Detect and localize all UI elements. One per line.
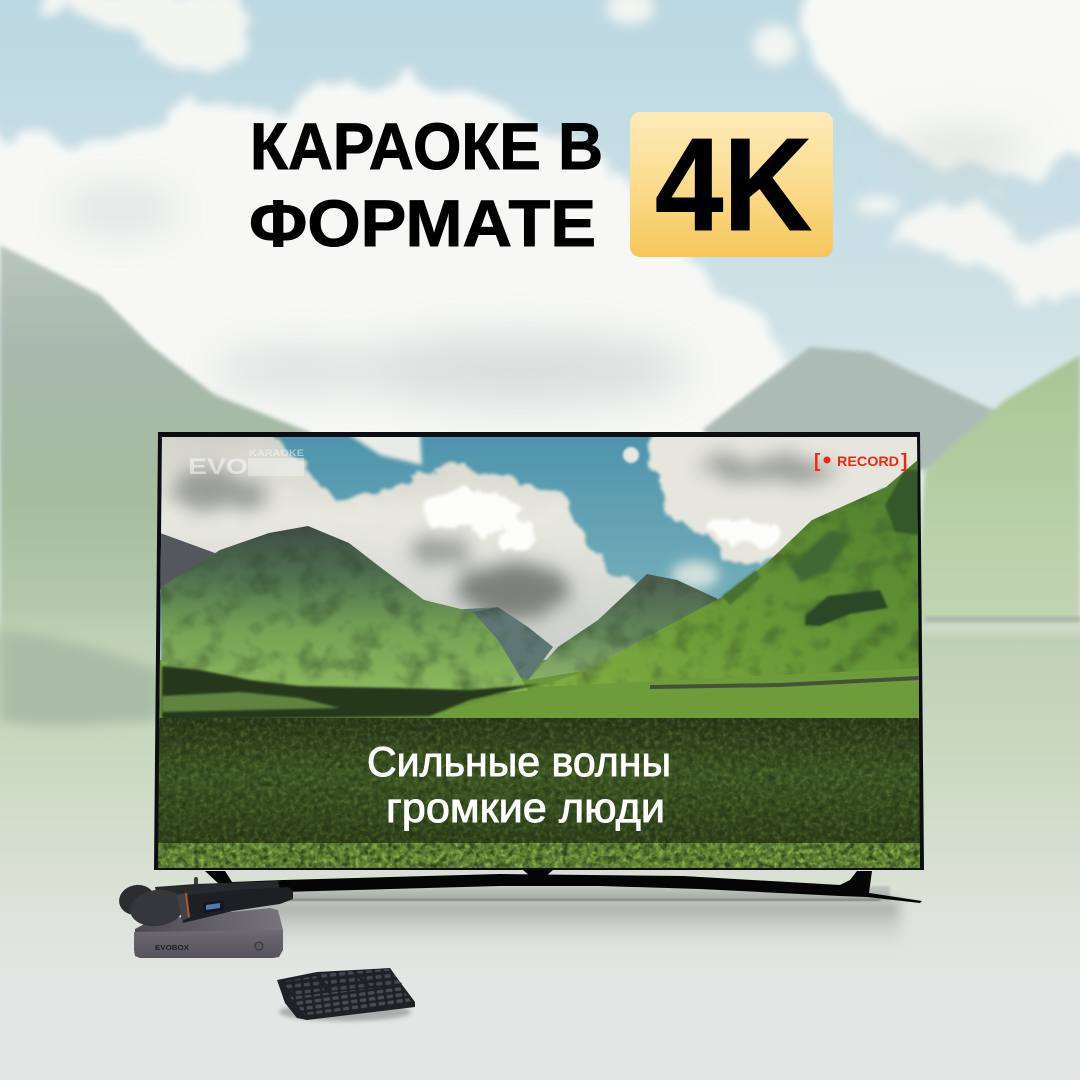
microphones bbox=[117, 877, 293, 930]
big central cloud bbox=[0, 78, 800, 450]
small top clouds bbox=[606, 0, 900, 214]
bright grass strip bbox=[150, 843, 930, 870]
title: karaoke in format: КАРАОКЕ В bbox=[250, 109, 603, 183]
lyric band over grass bbox=[150, 718, 930, 843]
logo: EVOBOX karaoke: EVO bbox=[188, 454, 248, 479]
screen mountains bbox=[150, 450, 930, 720]
title: karaoke in format bbox=[249, 109, 603, 260]
logo: EVOBOX karaoke: KARAOKE bbox=[249, 448, 304, 458]
tv frame bbox=[154, 432, 924, 870]
top right cloud bbox=[800, 0, 1080, 175]
top left cloud bbox=[40, 0, 248, 72]
lyrics on screen: Сильные волны bbox=[367, 738, 671, 785]
lyrics on screen: громкие люди bbox=[386, 784, 665, 831]
screen meadow and trees bbox=[162, 666, 920, 720]
remote control bbox=[277, 968, 415, 1021]
title: karaoke in format: ФОРМАТЕ bbox=[249, 186, 596, 260]
lyrics on screen bbox=[367, 738, 671, 831]
record indicator: RECORD bbox=[837, 453, 899, 469]
logo: EVOBOX karaoke bbox=[188, 448, 304, 479]
cloud shading bbox=[60, 134, 1030, 405]
record indicator bbox=[814, 451, 907, 472]
screen clouds bbox=[150, 425, 925, 660]
tv screen: landscape bbox=[150, 425, 930, 870]
tv stand centre tab bbox=[523, 870, 553, 876]
right small clouds bbox=[880, 195, 1080, 300]
media box: EVOBOX bbox=[155, 945, 189, 952]
record indicator: [ bbox=[814, 451, 821, 472]
badge: 4K: 4K bbox=[655, 111, 812, 258]
tv stand bbox=[205, 871, 922, 903]
record indicator: ] bbox=[901, 451, 907, 472]
media box bbox=[134, 908, 283, 958]
tv shadow on floor bbox=[190, 886, 900, 956]
background: faded mountains bbox=[0, 245, 1080, 1080]
